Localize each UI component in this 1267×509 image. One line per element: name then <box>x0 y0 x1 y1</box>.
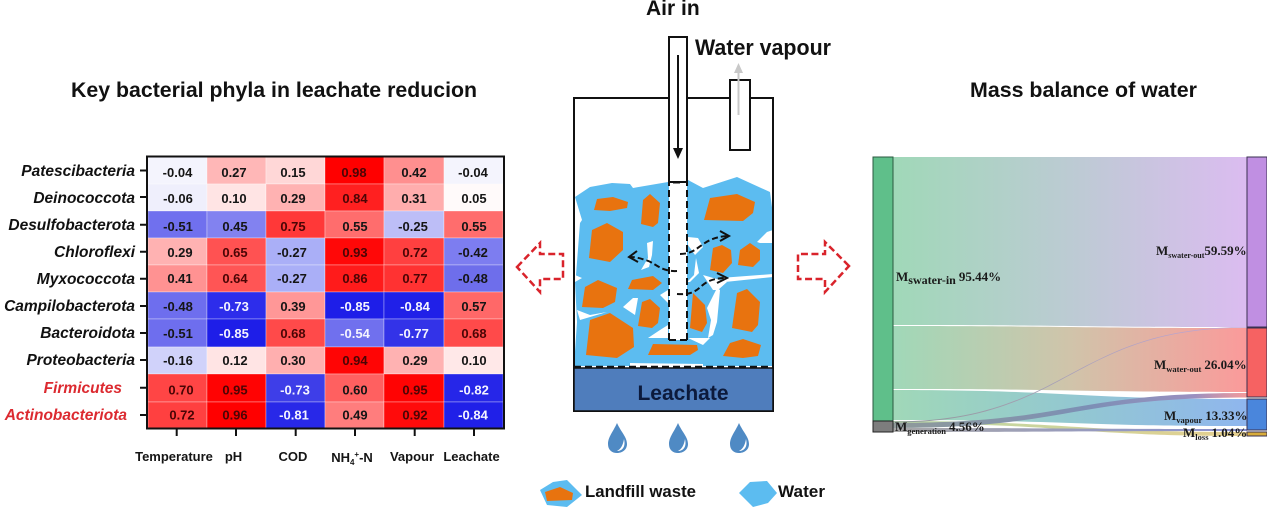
panel: sankey mass balance <box>873 157 1267 442</box>
phylum labels: Campilobacterota <box>4 298 135 315</box>
label: M water-out: M <box>1154 357 1166 372</box>
phylum labels: Proteobacteria <box>26 352 135 369</box>
panel: landfill reactor diagram <box>540 0 831 507</box>
heatmap row: Actinobacteriota: 0.49 <box>342 408 368 422</box>
heatmap row: Deinococcota: 0.10 <box>221 191 247 206</box>
heatmap row: Myxococcota <box>148 265 503 292</box>
heatmap row: Deinococcota <box>148 184 503 211</box>
heatmap row: Proteobacteria: 0.30 <box>280 353 306 368</box>
heatmap row: Patescibacteria: 0.42 <box>401 165 427 180</box>
phylum labels: Patescibacteria <box>21 163 135 180</box>
heatmap row: Campilobacterota: 0.39 <box>280 299 306 314</box>
heatmap row: Desulfobacterota: -0.51 <box>163 219 193 234</box>
heatmap row: Chloroflexi: 0.29 <box>167 245 193 260</box>
legend: landfill waste <box>540 480 696 507</box>
air tube <box>669 37 687 340</box>
heatmap row: Chloroflexi: -0.42 <box>458 245 488 260</box>
heatmap row: Myxococcota: -0.48 <box>458 271 488 286</box>
label: M generation: 4.56% <box>949 419 985 434</box>
phylum labels: Bacteroidota <box>40 325 135 342</box>
heatmap row: Desulfobacterota: 0.45 <box>222 219 248 234</box>
environmental factor labels: -N <box>359 450 373 465</box>
phylum labels: Chloroflexi <box>54 244 136 261</box>
heatmap row: Bacteroidota: -0.54 <box>340 326 371 341</box>
heatmap row: Bacteroidota: 0.68 <box>461 326 487 341</box>
environmental factor labels <box>135 449 500 467</box>
heatmap row: Proteobacteria: 0.10 <box>461 353 487 368</box>
legend: landfill waste: Landfill waste <box>585 483 696 501</box>
heatmap row: Firmicutes: 0.70 <box>168 382 194 398</box>
heatmap frame and ticks <box>140 156 504 436</box>
label: M generation: M <box>895 419 907 434</box>
heatmap row: Deinococcota: 0.31 <box>401 191 427 206</box>
environmental factor labels: Vapour <box>390 449 434 464</box>
environmental factor labels: NH <box>331 450 350 465</box>
title: mass balance of water: Mass balance of water <box>970 78 1198 102</box>
label: M swater-in: 95.44% <box>959 269 1001 284</box>
heatmap row: Firmicutes: 0.95 <box>222 382 248 398</box>
environmental factor labels: COD <box>279 449 307 464</box>
droplets <box>608 423 749 453</box>
heatmap row: Myxococcota: 0.86 <box>342 271 368 286</box>
title: key bacterial phyla: Key bacterial phyla in leachate reducion <box>71 78 477 102</box>
heatmap row: Bacteroidota <box>148 319 503 347</box>
heatmap row: Deinococcota: 0.05 <box>461 191 487 206</box>
label: M water-out: water-out <box>1166 364 1202 374</box>
phylum labels: Desulfobacterota <box>8 217 135 234</box>
heatmap row: Bacteroidota: -0.85 <box>219 326 249 341</box>
environmental factor labels: pH <box>225 449 242 464</box>
heatmap row: Campilobacterota: -0.73 <box>219 299 249 314</box>
water mass in the waste bed <box>574 177 773 366</box>
heatmap row: Deinococcota: -0.06 <box>163 191 193 206</box>
heatmap row: Proteobacteria <box>148 347 503 374</box>
arrow: left red dashed <box>517 243 563 292</box>
label: M loss: M <box>1183 425 1195 440</box>
heatmap row: Chloroflexi: 0.72 <box>402 245 428 260</box>
heatmap row: Actinobacteriota: 0.92 <box>402 408 428 422</box>
label: M water-out: 26.04% <box>1204 357 1247 372</box>
heatmap row: Deinococcota: 0.29 <box>280 191 306 206</box>
white gaps in waste bed <box>575 230 773 366</box>
heatmap row: Firmicutes: -0.82 <box>459 382 489 398</box>
heatmap row: Campilobacterota: -0.48 <box>163 299 193 314</box>
arrow: right red dashed <box>798 242 849 292</box>
heatmap row: Myxococcota: 0.64 <box>222 271 248 286</box>
arrow: air flowing down <box>673 55 683 159</box>
heatmap row: Proteobacteria: 0.94 <box>342 353 368 368</box>
heatmap row: Patescibacteria: 0.98 <box>341 165 367 180</box>
label: M loss: 1.04% <box>1212 425 1247 440</box>
heatmap row: Patescibacteria: -0.04 <box>163 165 193 180</box>
legend: water: Water <box>778 483 826 501</box>
environmental factor labels: Temperature <box>135 449 213 464</box>
reactor wall <box>574 98 773 411</box>
heatmap row: Chloroflexi <box>148 238 503 265</box>
heatmap row: Firmicutes: -0.73 <box>280 382 310 398</box>
phylum labels: Actinobacteriota <box>4 407 127 424</box>
heatmap row: Patescibacteria <box>148 157 503 184</box>
label: M vapour: M <box>1164 408 1176 423</box>
heatmap row: Chloroflexi: -0.27 <box>277 245 307 260</box>
sankey flows <box>893 157 1247 436</box>
heatmap row: Actinobacteriota: 0.96 <box>222 408 248 422</box>
heatmap row: Deinococcota: 0.84 <box>342 191 368 206</box>
legend: water <box>739 481 826 507</box>
heatmap row: Myxococcota: 0.41 <box>167 271 193 286</box>
heatmap row: Firmicutes: 0.95 <box>402 382 428 398</box>
heatmap row: Patescibacteria: 0.15 <box>280 165 306 180</box>
heatmap row: Desulfobacterota: 0.75 <box>280 219 306 234</box>
heatmap row: Bacteroidota: -0.51 <box>163 326 193 341</box>
heatmap row: Bacteroidota: -0.77 <box>399 326 429 341</box>
heatmap row: Firmicutes <box>148 374 503 402</box>
heatmap row: Desulfobacterota: 0.55 <box>342 219 368 234</box>
phylum labels: Firmicutes <box>44 380 122 397</box>
heatmap row: Patescibacteria: 0.27 <box>221 165 247 180</box>
label: M swater-out: M <box>1156 243 1168 258</box>
heatmap row: Myxococcota: -0.27 <box>277 271 307 286</box>
environmental factor labels: 4 <box>350 458 355 467</box>
environmental factor labels: Leachate <box>443 449 500 464</box>
label: M loss: loss <box>1195 432 1209 442</box>
heatmap row: Actinobacteriota: -0.81 <box>279 408 309 422</box>
environmental factor labels: + <box>354 450 359 459</box>
sankey left nodes <box>873 157 893 432</box>
heatmap row: Campilobacterota: 0.57 <box>461 299 487 314</box>
heatmap row: Chloroflexi: 0.65 <box>222 245 248 260</box>
sankey right nodes <box>1247 157 1267 436</box>
phylum labels: Myxococcota <box>37 271 135 288</box>
label: M generation: generation <box>907 426 946 436</box>
heatmap row: Desulfobacterota: 0.55 <box>461 219 487 234</box>
heatmap row: Patescibacteria: -0.04 <box>458 165 489 180</box>
panel: correlation heatmap <box>4 156 504 467</box>
label: M swater-out: 59.59% <box>1204 243 1247 258</box>
heatmap row: Proteobacteria: -0.16 <box>163 353 193 368</box>
heatmap row: Campilobacterota: -0.85 <box>340 299 370 314</box>
heatmap row: Campilobacterota: -0.84 <box>400 299 431 314</box>
heatmap row: Proteobacteria: 0.29 <box>402 353 428 368</box>
label: M swater-in: swater-in <box>908 273 956 287</box>
heatmap row: Desulfobacterota <box>148 211 503 238</box>
vapour outlet <box>730 63 750 150</box>
label: M vapour: 13.33% <box>1205 408 1248 423</box>
leachate layer: Leachate <box>637 382 729 405</box>
heatmap row: Actinobacteriota <box>148 402 503 428</box>
label: M swater-in: M <box>896 269 908 284</box>
phylum labels: Deinococcota <box>33 190 135 207</box>
heatmap row: Actinobacteriota: 0.72 <box>169 408 195 422</box>
phylum labels <box>4 163 136 424</box>
heatmap row: Campilobacterota <box>148 292 503 319</box>
heatmap row: Proteobacteria: 0.12 <box>222 353 248 368</box>
leachate layer <box>574 367 773 411</box>
dashed flow arrows <box>629 231 729 294</box>
label: water vapour: Water vapour <box>695 35 831 60</box>
heatmap row: Chloroflexi: 0.93 <box>342 245 368 260</box>
heatmap row: Bacteroidota: 0.68 <box>280 326 306 341</box>
heatmap row: Desulfobacterota: -0.25 <box>398 219 428 234</box>
label: M vapour: vapour <box>1176 415 1202 425</box>
heatmap row: Firmicutes: 0.60 <box>342 382 368 398</box>
heatmap row: Actinobacteriota: -0.84 <box>458 408 489 422</box>
label: M swater-out: swater-out <box>1168 251 1205 260</box>
orange waste pieces <box>582 194 761 358</box>
heatmap row: Myxococcota: 0.77 <box>402 271 428 286</box>
